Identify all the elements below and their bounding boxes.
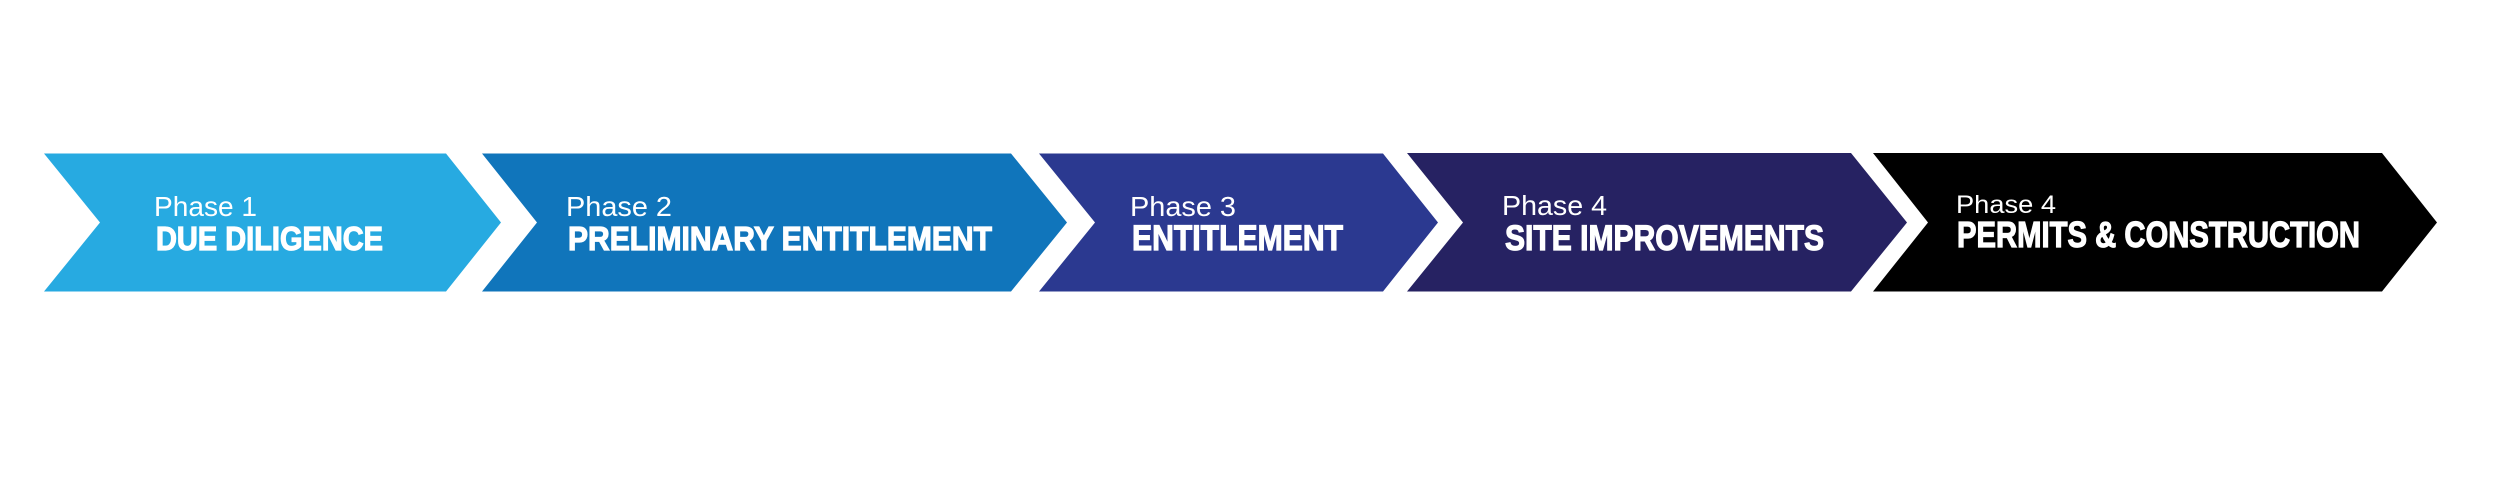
panel: phase 4 permits and construction: PERMITS & CONSTRUCTION: [1957, 214, 2360, 255]
panel: phase 3 entitlement: [1039, 154, 1438, 292]
panel: phase 1 due diligence: Phase 1: [154, 191, 257, 222]
panel: phase 4 site improvements: SITE IMPROVEMENTS: [1505, 219, 1824, 258]
panel: phase 2 preliminary entitlement: Phase 2: [566, 191, 672, 222]
panel: phase 2 preliminary entitlement: PRELIMINARY ENTITLEMENT: [568, 220, 992, 257]
panel: phase 1 due diligence: DUE DILIGENCE: [156, 220, 383, 257]
panel: phase 3 entitlement: Phase 3: [1130, 191, 1236, 222]
panel: phase 2 preliminary entitlement: [482, 154, 1067, 292]
panel: phase 4 site improvements: Phase 4: [1502, 190, 1607, 221]
panel: phase 1 due diligence: [44, 154, 501, 292]
panel: phase 4 permits and construction: Phase 4: [1956, 191, 2056, 219]
panel: phase 4 permits and construction: [1873, 153, 2437, 292]
panel: phase 4 site improvements: [1407, 153, 1907, 292]
panel: phase 3 entitlement: ENTITLEMENT: [1132, 219, 1343, 258]
